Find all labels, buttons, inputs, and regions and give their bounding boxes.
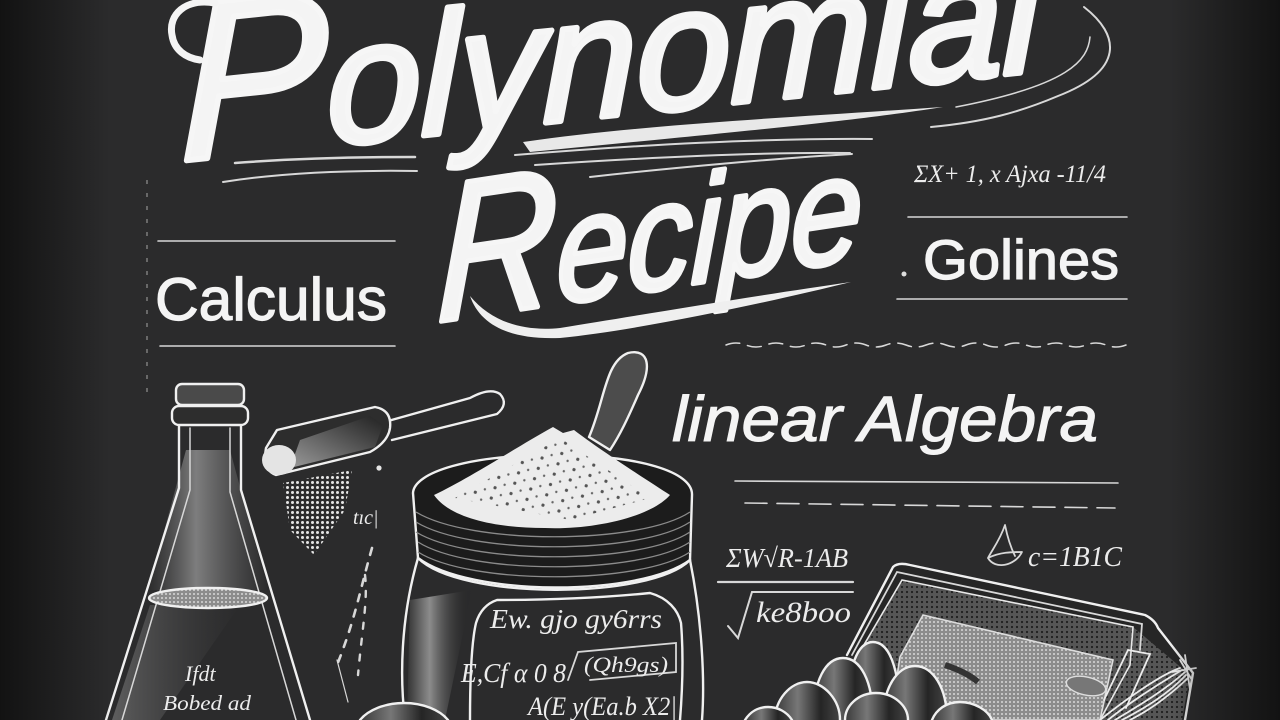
icon: whisk (1100, 650, 1196, 720)
label: linear Algebra (672, 383, 1118, 508)
title: Recipe: Recipe (435, 79, 866, 364)
icon: eggs (745, 642, 992, 720)
icon: measuring scoop with falling grains: tıc| (353, 507, 378, 529)
icon: measuring scoop with falling grains (262, 391, 504, 702)
formula: top right: ΣX+ 1, x Ajxa -11/4 (913, 161, 1106, 188)
formula: fraction: ke8boo (756, 596, 851, 629)
formula: triangle: c=1B1C (1028, 542, 1122, 573)
jar label text: E,Cf α 0 8 (460, 658, 566, 688)
label: Golines: Golines (923, 228, 1119, 291)
icon: bottle: Bobed ad (163, 691, 252, 715)
jar label text: Ew. gjo gy6rrs (489, 604, 662, 634)
icon: baking tray (847, 564, 1193, 720)
jar label text: (Qh9gs) (584, 652, 668, 677)
icon: bottle (106, 384, 310, 720)
wavy divider (726, 343, 1126, 347)
jar label text (460, 604, 677, 720)
formula: triangle (988, 525, 1122, 573)
chalk side marks (146, 180, 148, 400)
title underline strokes (223, 107, 943, 182)
label: Golines (897, 217, 1127, 299)
formula: fraction (718, 543, 853, 638)
icon: egg, bottom left (360, 703, 448, 720)
formula: fraction: ΣW√R-1AB (725, 543, 848, 573)
icon: bottle: Ifdt (184, 661, 216, 686)
label: Calculus: Calculus (155, 266, 387, 333)
label: linear Algebra: linear Algebra (672, 383, 1098, 455)
icon: jar of flour (402, 352, 703, 720)
